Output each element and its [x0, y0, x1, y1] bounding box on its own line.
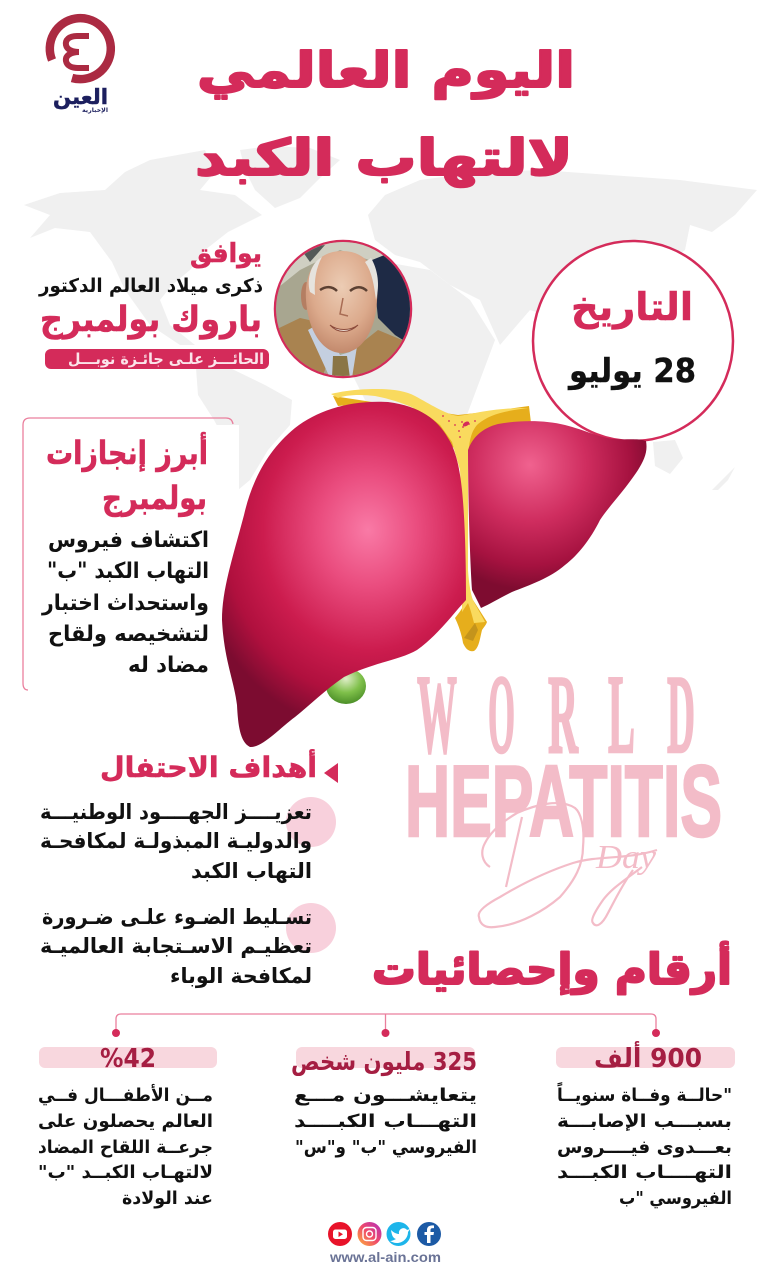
goal 2	[40, 903, 336, 988]
stat: 900 thousand: التهــــاب الكبـــد	[557, 1162, 732, 1183]
panel: Blumberg's achievements: التهاب الكبد "ب"	[47, 559, 209, 584]
world map background	[24, 146, 757, 490]
panel: Blumberg's achievements: لتشخيصه ولقاح	[48, 622, 209, 647]
world hepatitis day wordmark: L	[608, 653, 635, 777]
world hepatitis day wordmark: Day	[595, 839, 657, 876]
logo	[50, 18, 111, 114]
date circle: التاريخ	[571, 285, 693, 329]
stat: 325 million: يتعايشـــون مـــع	[294, 1085, 477, 1106]
social icons and website	[328, 1222, 441, 1265]
stat: 42 percent: العالم يحصلون على	[38, 1111, 213, 1132]
social icons and website: www.al-ain.com	[329, 1250, 441, 1265]
stat: 900 thousand: بعـــدوى فيــــروس	[557, 1137, 732, 1158]
portrait: Baruch Blumberg	[275, 240, 411, 378]
stat: 900 thousand: "حالــة وفــاة سنويــاً	[557, 1082, 732, 1106]
panel: Blumberg's achievements: أبرز إنجازات	[46, 432, 208, 473]
panel: Blumberg's achievements	[23, 418, 239, 690]
title: لالتهاب الكبد	[195, 129, 573, 188]
goal 1: تعزيــــز الجهــــود الوطنيـــة	[40, 800, 312, 824]
stat: 42 percent: عند الولادة	[122, 1188, 213, 1209]
world hepatitis day wordmark: D	[667, 653, 695, 777]
goal 2: لمكافحة الوباء	[170, 964, 312, 988]
badge: Nobel prize laureate: الحائـــز علـى جائـزة نوبـــل	[68, 350, 264, 368]
text: corresponds to birthday of Dr. Baruch Blumberg: باروك بولمبرج	[40, 300, 262, 340]
panel: Blumberg's achievements: مضاد له	[128, 653, 209, 678]
world hepatitis day wordmark: R	[548, 653, 578, 777]
panel: Blumberg's achievements: واستحداث اختبار	[41, 591, 209, 616]
goal 1: والدوليـة المبذولـة لمكافحـة	[40, 829, 312, 853]
stat: 325 million	[291, 1047, 477, 1158]
stat: 42 percent: جرعــة اللقاح المضاد	[38, 1137, 213, 1158]
logo: العين	[53, 85, 108, 109]
heading: celebration goals: أهداف الاحتفال	[100, 749, 317, 784]
stat: 900 thousand: 900 ألف	[594, 1041, 702, 1074]
stat: 900 thousand	[556, 1041, 735, 1209]
stat: 900 thousand: الفيروسي "ب	[619, 1188, 732, 1209]
logo: الإخبارية	[82, 107, 108, 114]
world hepatitis day wordmark: O	[488, 653, 515, 777]
goal 1: التهاب الكبد	[191, 859, 312, 883]
stat: 42 percent: %42	[100, 1044, 156, 1074]
connector tree	[112, 1014, 660, 1037]
goal 2: تعظيـم الاسـتجابة العالميـة	[40, 934, 312, 958]
stat: 325 million: التهـــاب الكبــــد	[294, 1111, 477, 1132]
date circle: 28 يوليو	[567, 351, 696, 391]
panel: Blumberg's achievements: اكتشاف فيروس	[48, 528, 209, 553]
world hepatitis day wordmark: W	[417, 653, 457, 777]
title: اليوم العالمي	[197, 42, 575, 99]
stat: 900 thousand: بسبـــب الإصابـــة	[557, 1111, 732, 1132]
title	[195, 42, 575, 188]
text: corresponds to birthday of Dr. Baruch Blumberg: ذكرى ميلاد العالم الدكتور	[38, 275, 263, 297]
stat: 325 million: الفيروسي "ب" و"س"	[295, 1137, 477, 1158]
stat: 42 percent: مــن الأطفـــال فــي	[38, 1084, 213, 1106]
stat: 325 million: 325 مليون شخص	[291, 1047, 477, 1077]
date circle	[533, 241, 733, 441]
goal 1	[40, 797, 336, 883]
goal 2: تسـليط الضـوء علـى ضـرورة	[42, 905, 312, 929]
stat: 42 percent: لالتهـاب الكبــد "ب"	[38, 1162, 213, 1183]
panel: Blumberg's achievements: بولمبرج	[102, 479, 207, 517]
world hepatitis day wordmark	[405, 653, 722, 927]
text: corresponds to birthday of Dr. Baruch Blumberg: يوافق	[190, 239, 262, 269]
text: corresponds to birthday of Dr. Baruch Blumberg	[38, 239, 263, 340]
liver illustration	[222, 389, 647, 747]
heading: figures and statistics: أرقام وإحصائيات	[372, 941, 732, 995]
stat: 42 percent	[38, 1044, 217, 1209]
